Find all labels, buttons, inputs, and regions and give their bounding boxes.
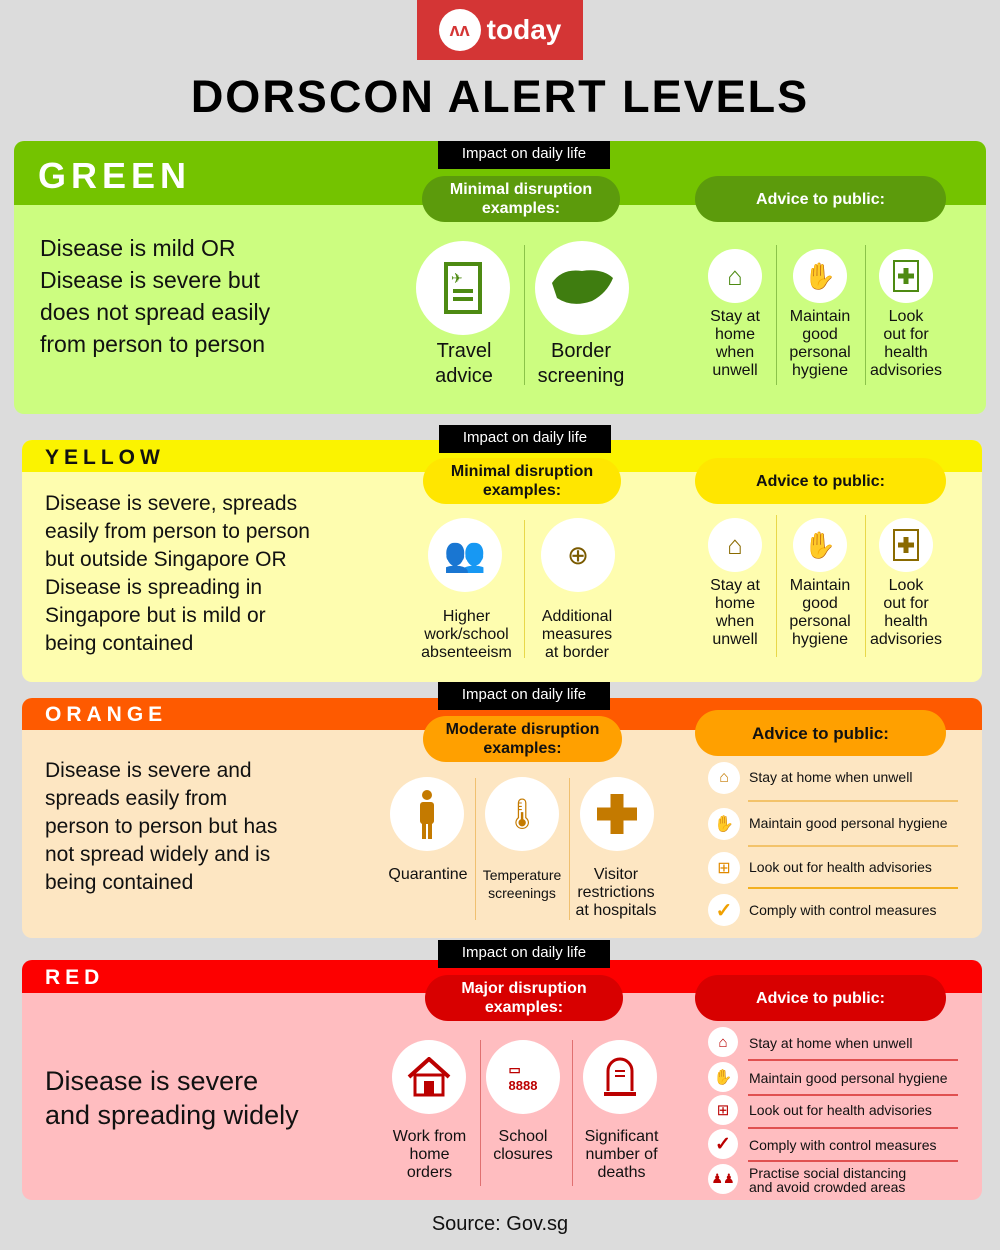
panel: orange: ⌂ [719, 769, 729, 786]
panel: orange: ✓ [716, 900, 732, 922]
panel: green: screening [538, 365, 624, 387]
panel: yellow: Look [889, 577, 923, 594]
panel: yellow: Minimal disruption [451, 463, 593, 480]
panel: orange: Maintain good personal hygiene [749, 815, 947, 831]
panel: red: Maintain good personal hygiene [749, 1070, 947, 1086]
panel: red: orders [407, 1164, 452, 1181]
panel: green: when [716, 344, 754, 361]
panel: green: Travel [437, 340, 491, 362]
impact label red: Impact on daily life [462, 944, 586, 961]
panel: red: home [409, 1146, 450, 1163]
panel: yellow: Additional [542, 608, 612, 625]
panel: yellow: out for [883, 595, 929, 612]
panel: red: Significant [585, 1128, 658, 1145]
panel: orange: 🌡 [503, 798, 541, 830]
panel: red: ✓ [715, 1134, 731, 1154]
panel: yellow: Maintain [790, 577, 850, 594]
panel: red: RED [45, 966, 104, 989]
panel: red: ⊞ [717, 1102, 729, 1119]
panel: red: ♟♟ [711, 1171, 735, 1186]
panel: yellow: good [802, 595, 838, 612]
panel: orange: ⊞ [717, 860, 731, 877]
panel: yellow: Stay at [710, 577, 760, 594]
panel: red: Work from [393, 1128, 466, 1145]
panel: orange: Advice to public: [752, 724, 889, 742]
panel: yellow: being contained [45, 632, 193, 655]
panel: orange: restrictions [577, 884, 655, 901]
panel: red: ✋ [714, 1069, 732, 1086]
panel: red: Disease is severe [45, 1066, 258, 1096]
panel: yellow: work/school [424, 626, 509, 643]
panel: green: unwell [712, 362, 758, 379]
panel: green: health [884, 344, 928, 361]
panel: red: and spreading widely [45, 1100, 299, 1130]
panel: red: Comply with control measures [749, 1137, 937, 1153]
panel: yellow: absenteeism [421, 644, 512, 661]
impact label yellow [439, 425, 611, 453]
panel: green: advisories [870, 362, 942, 379]
panel: yellow: health [884, 613, 928, 630]
logo [417, 0, 583, 60]
panel: red: Advice to public: [756, 990, 885, 1006]
source: Source: Gov.sg [432, 1213, 568, 1235]
panel: green: Stay at [710, 308, 760, 325]
panel: orange: screenings [488, 885, 556, 901]
panel: yellow: ✋ [804, 530, 836, 560]
panel: yellow: Higher [443, 608, 490, 625]
panel: yellow: YELLOW [45, 446, 165, 469]
panel: red: Look out for health advisories [749, 1102, 932, 1118]
panel: red: and avoid crowded areas [749, 1179, 905, 1195]
panel: green: does not spread easily [40, 299, 270, 325]
panel: orange: Quarantine [388, 866, 468, 883]
panel: green: out for [883, 326, 929, 343]
panel: green: examples: [482, 200, 560, 217]
panel: orange: Moderate disruption [446, 721, 599, 738]
panel: yellow: unwell [712, 631, 758, 648]
panel: orange: at hospitals [576, 902, 656, 919]
panel: yellow: Disease is severe, spreads [45, 492, 297, 515]
panel: green: personal [789, 344, 851, 361]
panel: green: Advice to public: [756, 190, 885, 208]
logo: ʌʌ [450, 20, 470, 40]
panel: orange: examples: [483, 740, 562, 757]
panel: red: ⌂ [718, 1034, 728, 1050]
panel: orange: Look out for health advisories [749, 859, 932, 875]
panel: yellow: measures [542, 626, 612, 643]
panel: yellow: but outside Singapore OR [45, 548, 287, 571]
panel: orange: being contained [45, 871, 193, 894]
panel: orange: spreads easily from [45, 787, 227, 810]
panel: green: good [802, 326, 838, 343]
panel: orange: ORANGE [45, 703, 167, 726]
panel: green: advice [435, 365, 493, 387]
panel: yellow: examples: [483, 482, 561, 499]
panel: green [14, 141, 986, 414]
panel: orange: ✋ [714, 816, 734, 833]
panel: yellow [22, 440, 982, 682]
logo: today [487, 14, 561, 45]
panel: orange: person to person but has [45, 815, 277, 838]
panel: green: home [715, 326, 755, 343]
panel: red: deaths [597, 1164, 646, 1181]
panel: red: School [499, 1128, 547, 1145]
panel: red [22, 960, 982, 1200]
panel: green: hygiene [792, 362, 848, 379]
panel: red: ▭ [509, 1062, 521, 1076]
impact label green: Impact on daily life [462, 145, 586, 162]
impact label green [438, 141, 610, 169]
panel: green: ⌂ [727, 260, 743, 290]
impact label red [438, 940, 610, 968]
panel: yellow: ⊕ [567, 540, 589, 570]
panel: orange: Visitor [594, 866, 638, 883]
panel: yellow: advisories [870, 631, 942, 648]
panel: green: ✈ [451, 270, 463, 286]
panel: orange: Stay at home when unwell [749, 769, 912, 785]
panel: green: ✋ [804, 260, 836, 290]
panel: yellow: easily from person to person [45, 520, 310, 543]
panel: yellow: Singapore but is mild or [45, 604, 266, 627]
panel: yellow: personal [789, 613, 851, 630]
panel: yellow: when [716, 613, 754, 630]
panel: yellow: ⌂ [727, 530, 743, 560]
panel: red: Stay at home when unwell [749, 1035, 912, 1051]
panel: green: GREEN [38, 155, 191, 196]
panel: green: from person to person [40, 331, 265, 357]
panel: green: Disease is severe but [40, 267, 260, 293]
panel: yellow: 👥 [444, 536, 486, 574]
panel: red: 8888 [509, 1078, 537, 1092]
title: DORSCON ALERT LEVELS [191, 71, 809, 122]
impact label orange [438, 682, 610, 710]
panel: orange [22, 698, 982, 938]
panel: green: Look [889, 308, 923, 325]
panel: yellow: Advice to public: [756, 472, 885, 490]
impact label yellow: Impact on daily life [463, 429, 587, 446]
panel: red: Practise social distancing [749, 1165, 906, 1181]
panel: yellow: Disease is spreading in [45, 576, 262, 599]
impact label orange: Impact on daily life [462, 686, 586, 703]
panel: yellow: hygiene [792, 631, 848, 648]
panel: orange: Disease is severe and [45, 759, 252, 782]
panel: green: Border [551, 340, 611, 362]
panel: yellow: home [715, 595, 755, 612]
panel: green: Disease is mild OR [40, 235, 236, 261]
panel: orange: Temperature [483, 867, 561, 883]
panel: red: Major disruption [461, 980, 587, 997]
panel: yellow: at border [545, 644, 609, 661]
panel: green: Minimal disruption [450, 181, 592, 198]
panel: red: closures [493, 1146, 553, 1163]
panel: orange: Comply with control measures [749, 902, 937, 918]
panel: orange: not spread widely and is [45, 843, 270, 866]
panel: green: Maintain [790, 308, 850, 325]
panel: red: number of [585, 1146, 658, 1163]
panel: red: examples: [485, 999, 563, 1016]
